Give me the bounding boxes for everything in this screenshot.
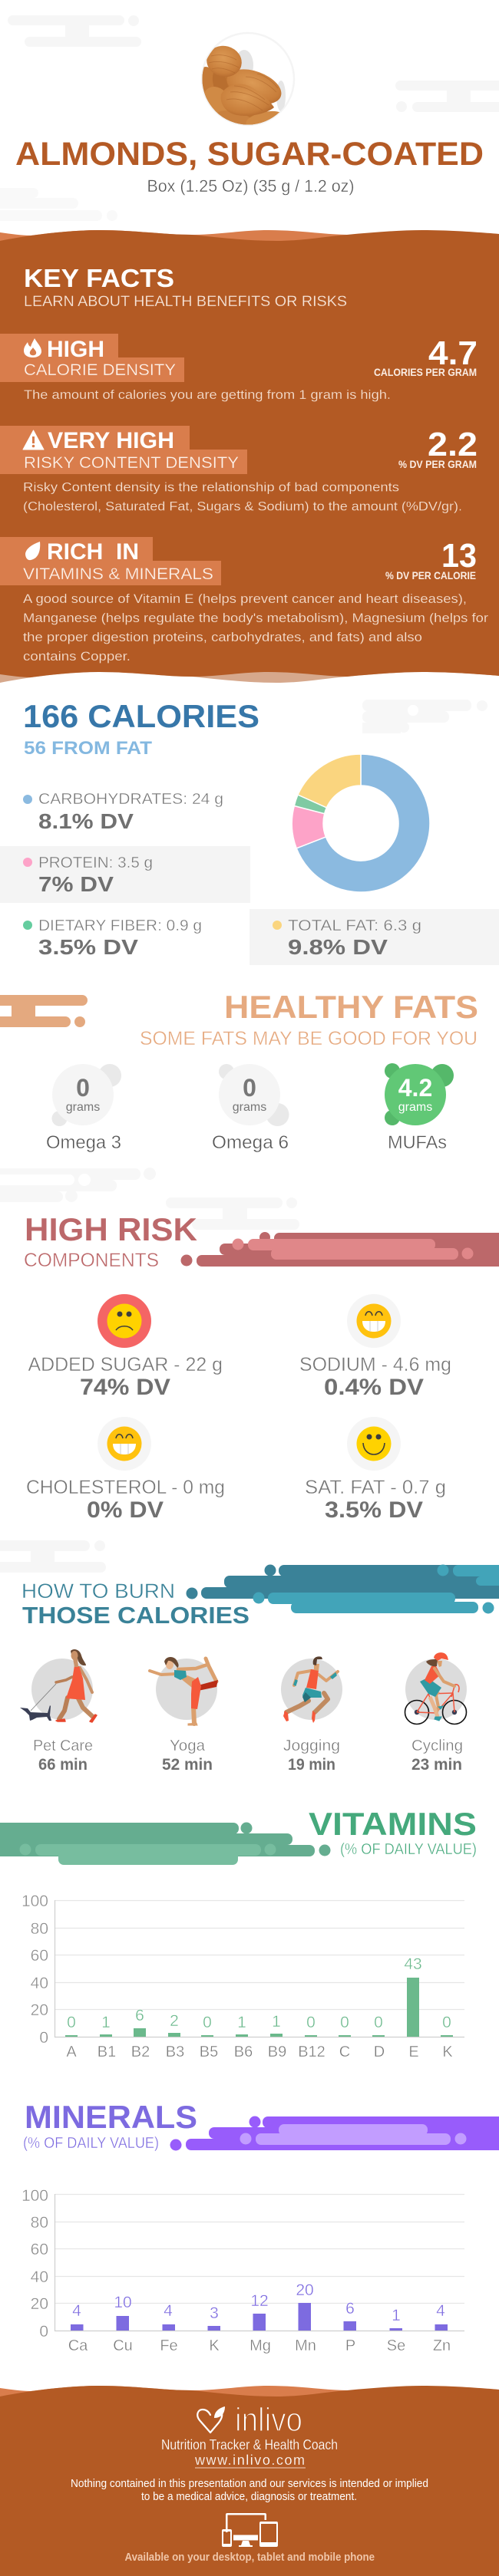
legend: total fat: 9.8% DV xyxy=(288,935,388,959)
bar chart: minerals: 4 xyxy=(72,2302,81,2320)
background row: protein xyxy=(0,846,250,903)
value unit: % DV PER CALORIE xyxy=(385,570,476,581)
bar chart: minerals xyxy=(21,2187,464,2354)
label: calorie density: CALORIE DENSITY xyxy=(24,361,176,379)
bar chart: vitamins: 60 xyxy=(31,1947,48,1965)
description: The amount of calories you are getting from 1 gram is high. xyxy=(24,387,391,402)
bar chart: minerals: 0 xyxy=(39,2323,48,2340)
bar chart: vitamins: K xyxy=(442,2044,453,2060)
activity: jogging: Jogging xyxy=(283,1738,340,1754)
bar chart: vitamins: B1 xyxy=(97,2044,116,2060)
panel: how to burn those calories xyxy=(20,1580,467,1774)
bar chart: vitamins: E xyxy=(408,2044,419,2060)
bar chart: minerals: Mn xyxy=(295,2337,316,2354)
activity: jogging xyxy=(281,1656,342,1774)
bar chart: vitamins: 0 xyxy=(374,2014,383,2031)
panel: minerals xyxy=(21,2099,464,2354)
item: cholesterol xyxy=(26,1417,225,1523)
activity: yoga: Yoga xyxy=(170,1738,206,1754)
description: Risky Content density is the relationship of bad components xyxy=(23,480,399,494)
panel: footer xyxy=(0,2386,499,2576)
bar chart: minerals: K xyxy=(209,2337,220,2354)
bar chart: vitamins: 0 xyxy=(306,2014,316,2031)
bar chart: vitamins: 20 xyxy=(31,2001,48,2019)
item: cholesterol: 0% DV xyxy=(87,1497,164,1523)
activity: yoga: 52 min xyxy=(162,1756,213,1774)
icon: leaf xyxy=(25,542,40,560)
activity: jogging: 19 min xyxy=(288,1756,335,1774)
subheading: LEARN ABOUT HEALTH BENEFITS OR RISKS xyxy=(24,294,347,310)
decorative cloud top left xyxy=(8,15,141,47)
legend: protein: PROTEIN: 3.5 g xyxy=(38,855,153,871)
bar chart: vitamins: B5 xyxy=(200,2044,218,2060)
item: added sugar xyxy=(28,1294,223,1400)
bar chart: minerals: 80 xyxy=(31,2214,48,2232)
decorative cloud mid left xyxy=(0,1168,156,1202)
background row: total fat xyxy=(250,909,499,965)
stat: omega 3 xyxy=(46,1064,121,1153)
bar chart: minerals: 6 xyxy=(345,2300,355,2317)
bar chart: vitamins: D xyxy=(374,2044,385,2060)
legend: total fat xyxy=(273,917,421,959)
activity: cycling xyxy=(405,1652,467,1774)
banner: burn calories xyxy=(186,1565,499,1614)
panel: healthy fats xyxy=(46,989,478,1153)
icon: warning triangle xyxy=(23,430,44,450)
legend: dietary fiber: 3.5% DV xyxy=(38,935,138,959)
heading line 2: THOSE CALORIES xyxy=(22,1602,250,1629)
availability note: Available on your desktop, tablet and mobile phone xyxy=(124,2551,375,2564)
bar chart: vitamins: 43 xyxy=(404,1955,422,1973)
legend: protein xyxy=(23,855,153,896)
stat: omega 3: Omega 3 xyxy=(46,1132,121,1153)
bar chart: minerals: 20 xyxy=(31,2295,48,2313)
banner: vitamins xyxy=(0,1823,330,1865)
bar chart: vitamins: 0 xyxy=(39,2029,48,2047)
stat: omega 6 xyxy=(212,1064,289,1153)
bar chart: vitamins: A xyxy=(66,2044,77,2060)
stat: omega 6: grams xyxy=(233,1101,266,1114)
bar chart: minerals: 4 xyxy=(164,2302,173,2320)
description: Manganese (helps regulate the body's metabolism), Magnesium (helps for xyxy=(23,611,488,625)
bar chart: minerals: 60 xyxy=(31,2241,48,2258)
heading: 166 calories: 166 CALORIES xyxy=(23,698,259,734)
label: risky content density: RISKY CONTENT DENSITY xyxy=(24,454,239,472)
item: saturated fat: 3.5% DV xyxy=(325,1497,423,1523)
bar chart: minerals: 4 xyxy=(436,2302,445,2320)
heading: high risk: HIGH RISK xyxy=(25,1211,197,1247)
subheading: 56 from fat: 56 FROM FAT xyxy=(24,738,152,759)
decorative cloud burn xyxy=(0,1540,106,1573)
item: cholesterol: CHOLESTEROL - 0 mg xyxy=(26,1477,225,1498)
subheading: components: COMPONENTS xyxy=(24,1250,159,1271)
activity: pet care: 66 min xyxy=(38,1756,88,1774)
item: sodium: SODIUM - 4.6 mg xyxy=(299,1354,451,1375)
bar chart: vitamins: B6 xyxy=(234,2044,253,2060)
value unit: % DV PER GRAM xyxy=(398,459,477,470)
label: very high: VERY HIGH xyxy=(48,428,174,453)
panel: vitamins xyxy=(21,1806,477,2060)
label: vitamins and minerals: VITAMINS & MINERALS xyxy=(23,565,213,583)
bar chart: vitamins: B3 xyxy=(166,2044,184,2060)
bar chart: minerals: Fe xyxy=(160,2337,178,2354)
activity: pet care: Pet Care xyxy=(33,1738,93,1754)
heading: key facts: KEY FACTS xyxy=(24,264,174,292)
activity: cycling: 23 min xyxy=(411,1756,462,1774)
bar chart: minerals: 1 xyxy=(392,2307,401,2324)
banner: high risk xyxy=(181,1232,499,1267)
bar chart: minerals: 12 xyxy=(250,2292,269,2310)
bar chart: vitamins: B2 xyxy=(131,2044,150,2060)
title: ALMONDS, SUGAR-COATED xyxy=(15,136,484,173)
legend: dietary fiber: DIETARY FIBER: 0.9 g xyxy=(38,917,202,934)
heading: vitamins: VITAMINS xyxy=(309,1806,477,1842)
bar chart: vitamins: C xyxy=(339,2044,350,2060)
bar chart: minerals: 40 xyxy=(31,2268,48,2286)
label: high: HIGH xyxy=(47,337,104,362)
subheading: (% OF DAILY VALUE) xyxy=(23,2135,159,2152)
legend: dietary fiber xyxy=(23,917,202,959)
bar chart: vitamins: 100 xyxy=(21,1892,48,1910)
bar chart: vitamins: 0 xyxy=(67,2014,76,2031)
banner: minerals xyxy=(170,2116,499,2151)
bar chart: vitamins: 0 xyxy=(203,2014,212,2031)
activity: yoga xyxy=(150,1657,218,1774)
item: saturated fat xyxy=(305,1417,446,1523)
bar chart: vitamins: 6 xyxy=(135,2007,144,2024)
value: 2.2: 2.2 xyxy=(428,426,478,463)
bar chart: vitamins: 1 xyxy=(237,2014,246,2031)
bar chart: minerals: Ca xyxy=(68,2337,88,2354)
description: (Cholesterol, Saturated Fat, Sugars & Sodium) to the amount (%DV/gr). xyxy=(23,499,462,514)
description: the proper digestion proteins, carbohydrates, and fats) and also xyxy=(23,630,422,644)
decorative cloud calories xyxy=(362,700,487,733)
stat: omega 3: grams xyxy=(66,1101,100,1114)
legend: carbohydrates: CARBOHYDRATES: 24 g xyxy=(38,791,223,808)
bar chart: vitamins: 2 xyxy=(170,2012,179,2030)
stat: mufas xyxy=(385,1063,454,1153)
bar chart: minerals: Cu xyxy=(113,2337,133,2354)
item: sodium xyxy=(299,1294,451,1400)
heading line 1: HOW TO BURN xyxy=(21,1580,175,1603)
food photo: almonds xyxy=(201,32,295,126)
bar chart: vitamins: 80 xyxy=(31,1920,48,1938)
bar chart: minerals: 100 xyxy=(21,2187,48,2205)
disclaimer xyxy=(71,2477,428,2503)
panel: high risk components xyxy=(24,1211,451,1523)
label: rich in: RICH IN xyxy=(47,539,139,565)
legend: protein: 7% DV xyxy=(38,872,114,896)
stat: mufas: MUFAs xyxy=(388,1132,447,1153)
decorative banner: healthy fats xyxy=(0,995,88,1027)
bar chart: vitamins: B12 xyxy=(298,2044,326,2060)
disclaimer: Nothing contained in this presentation and our services is intended or implied xyxy=(71,2477,428,2490)
bar chart: vitamins xyxy=(21,1892,464,2060)
bar chart: vitamins: 1 xyxy=(101,2014,111,2031)
bar chart: vitamins: 0 xyxy=(442,2014,451,2031)
bar chart: vitamins: B9 xyxy=(268,2044,286,2060)
bar chart: minerals: 20 xyxy=(296,2281,314,2299)
bar chart: minerals: P xyxy=(345,2337,355,2354)
stat: omega 3: 0 xyxy=(76,1074,90,1102)
stat: omega 6: 0 xyxy=(243,1074,256,1102)
icon: flame xyxy=(24,338,41,357)
donut chart xyxy=(292,754,430,892)
logo: inlivo xyxy=(197,2401,302,2439)
activity: pet care xyxy=(20,1649,97,1774)
subheading: SOME FATS MAY BE GOOD FOR YOU xyxy=(140,1028,478,1049)
description xyxy=(23,480,462,514)
bar chart: vitamins: 40 xyxy=(31,1975,48,1992)
decorative cloud mid center xyxy=(166,1197,299,1230)
heading: minerals: MINERALS xyxy=(25,2099,197,2135)
bar chart: minerals: Zn xyxy=(433,2337,451,2354)
item: sodium: 0.4% DV xyxy=(324,1375,424,1400)
item: added sugar: 74% DV xyxy=(80,1375,170,1400)
stat: mufas: grams xyxy=(398,1101,432,1114)
bar chart: minerals: Mg xyxy=(250,2337,271,2354)
disclaimer: to be a medical advice, diagnosis or treatment. xyxy=(141,2490,357,2503)
bar chart: minerals: Se xyxy=(387,2337,405,2354)
bar chart: vitamins: 1 xyxy=(272,2013,281,2031)
decorative cloud top right xyxy=(395,81,499,112)
description: A good source of Vitamin E (helps prevent cancer and heart diseases), xyxy=(23,591,467,606)
fact: rich in vitamins and minerals xyxy=(0,537,488,664)
tagline: Nutrition Tracker & Health Coach xyxy=(161,2437,338,2452)
website link: www.inlivo.com xyxy=(194,2452,305,2468)
fact: risky content density xyxy=(0,426,478,514)
decorative cloud left xyxy=(0,188,117,221)
fact: calorie density xyxy=(0,334,478,402)
serving size subtitle: Box (1.25 Oz) (35 g / 1.2 oz) xyxy=(147,176,355,196)
value: 13: 13 xyxy=(441,537,477,575)
logo: inlivo: inlivo xyxy=(235,2401,302,2439)
heading: healthy fats: HEALTHY FATS xyxy=(224,989,478,1025)
legend: carbohydrates xyxy=(23,791,223,833)
description xyxy=(23,591,488,664)
stat: omega 6: Omega 6 xyxy=(212,1132,289,1153)
value unit: CALORIES PER GRAM xyxy=(374,367,477,378)
activity: cycling: Cycling xyxy=(411,1738,463,1754)
legend: total fat: TOTAL FAT: 6.3 g xyxy=(288,917,421,934)
description: contains Copper. xyxy=(23,649,131,664)
value: 4.7: 4.7 xyxy=(428,334,478,372)
bar chart: vitamins: 0 xyxy=(340,2014,349,2031)
icon: devices xyxy=(222,2513,278,2547)
subheading: (% OF DAILY VALUE) xyxy=(340,1841,477,1858)
item: saturated fat: SAT. FAT - 0.7 g xyxy=(305,1477,446,1498)
bar chart: minerals: 3 xyxy=(210,2304,219,2322)
stat: mufas: 4.2 xyxy=(398,1074,432,1102)
item: added sugar: ADDED SUGAR - 22 g xyxy=(28,1354,223,1375)
panel: key facts xyxy=(0,230,499,683)
bar chart: minerals: 10 xyxy=(114,2294,132,2311)
legend: carbohydrates: 8.1% DV xyxy=(38,809,134,833)
panel: calories xyxy=(0,698,499,965)
